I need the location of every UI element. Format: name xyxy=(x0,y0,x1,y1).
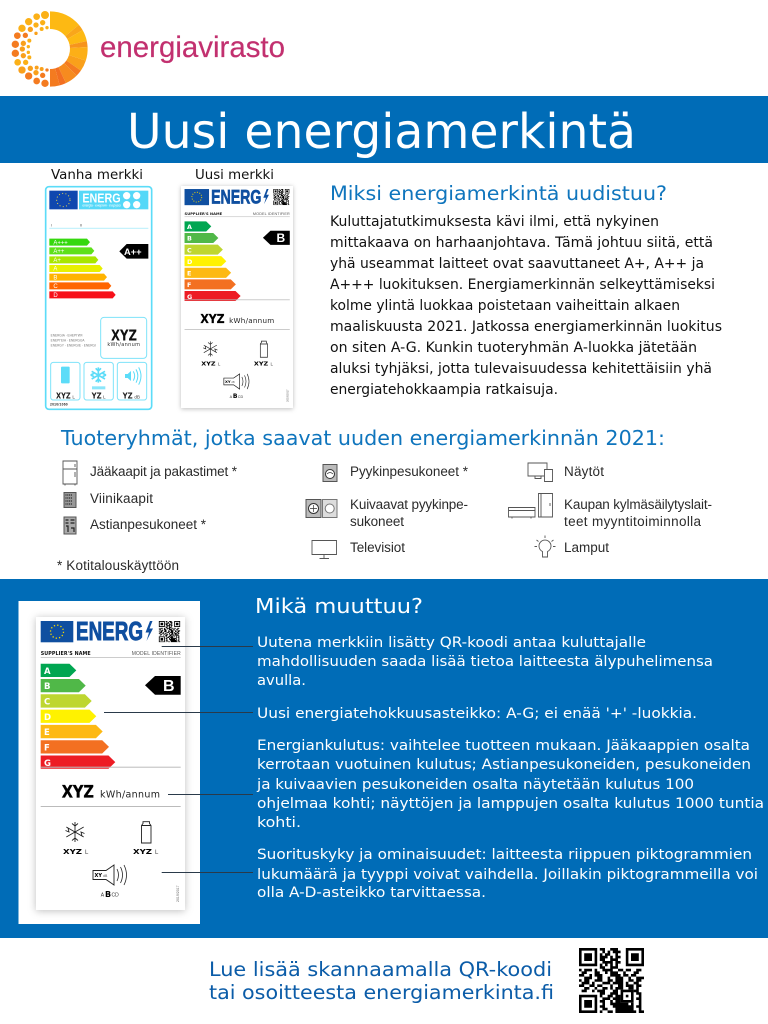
new energy label, large: L xyxy=(85,850,89,856)
text: QR code: Uutena merkkiin lisätty QR-koodi antaa kuluttajalle xyxy=(257,635,646,651)
text: energy consumption: kerrotaan vuotuinen kulutus; Astianpesukoneiden, pesukoneiden xyxy=(257,757,751,773)
panel: why the label is changing xyxy=(330,182,722,398)
icon: wine cabinet xyxy=(64,492,76,508)
new energy label, small: XYZ xyxy=(200,311,225,326)
icon: television xyxy=(312,540,336,558)
old energy label: ENERGIA · ЕНЕРГИЯ xyxy=(51,334,83,338)
new energy label, large: XYZ xyxy=(62,783,94,802)
new energy label, large: dB xyxy=(103,874,108,878)
item: washer dryers: Kuivaavat pyykinpe- xyxy=(350,497,468,512)
new energy label, large: L xyxy=(155,850,159,856)
footer QR code xyxy=(579,948,644,1013)
new energy label, large: MODEL IDENTIFIER xyxy=(132,651,181,657)
text: performance and features xyxy=(257,847,758,901)
icon: washing machine xyxy=(323,464,337,482)
old energy label: II xyxy=(80,223,82,228)
new energy label, small: XY xyxy=(225,380,231,384)
footnote: * Kotitalouskäyttöön xyxy=(57,558,179,573)
old energy label: energia · енергия · ενεργεια xyxy=(82,203,121,207)
text block: yhä useammat laitteet ovat saavuttaneet A+, A++ ja xyxy=(330,256,704,272)
new energy label, small: C xyxy=(187,246,192,254)
new energy label, large: A xyxy=(44,667,51,677)
old energy label: YZ xyxy=(91,391,102,400)
new energy label, large: XYZ xyxy=(133,848,152,856)
item: televisions: Televisiot xyxy=(350,540,405,555)
text: efficiency scale: Uusi energiatehokkuusasteikko: A-G; ei enää '+' -luokkia. xyxy=(257,706,697,722)
old energy label: ΕΝΕΡΓΕΙΑ · ENERGIJA xyxy=(51,339,85,343)
heading: Miksi energiamerkintä uudistuu? xyxy=(330,182,667,205)
new energy label, large: B xyxy=(44,682,50,692)
old energy label: I xyxy=(51,223,52,228)
text block xyxy=(330,214,722,398)
new energy label, large: F xyxy=(44,744,50,754)
text: performance and features: Suorituskyky ja ominaisuudet: laitteesta riippuen piktogrammien xyxy=(257,847,752,863)
new energy label, large: D xyxy=(44,713,51,723)
new energy label, large: CD xyxy=(112,893,119,899)
new energy label, large: G xyxy=(44,759,51,769)
new energy label, large: B xyxy=(105,890,111,899)
old energy label: L xyxy=(103,394,106,399)
new energy label, small: MODEL IDENTIFIER xyxy=(253,212,290,216)
new energy label, large: 2019/2017 xyxy=(176,885,180,902)
old energy label: A++ xyxy=(53,249,65,255)
new energy label, small: L xyxy=(218,362,221,367)
old energy label: A xyxy=(53,267,57,273)
new energy label, small: F xyxy=(187,281,191,289)
new energy label, small: B xyxy=(233,393,238,400)
new energy label, small: B xyxy=(187,235,192,243)
old energy label: C xyxy=(53,284,58,290)
new energy label, large: SUPPLIER'S NAME xyxy=(41,651,91,657)
item: displays: Näytöt xyxy=(564,464,604,479)
new energy label, large: E xyxy=(44,728,50,738)
new energy label, small: B xyxy=(276,231,285,245)
old energy label: A++ xyxy=(124,247,142,257)
new energy label, small: dB xyxy=(231,380,235,384)
new energy label, large: A xyxy=(101,893,105,899)
new energy label, large: kWh/annum xyxy=(100,790,160,801)
item: lamps: Lamput xyxy=(564,540,609,555)
item: commercial refrigerators xyxy=(564,497,712,529)
old energy label: D xyxy=(53,293,58,299)
text: performance and features: olla A-D-asteikko tarvittaessa. xyxy=(257,885,486,901)
text: energy consumption xyxy=(256,738,764,831)
item: dishwashers: Astianpesukoneet * xyxy=(90,517,207,532)
new energy label, large: XYZ xyxy=(63,848,82,856)
heading: Tuoteryhmät, jotka saavat uuden energiamerkinnän 2021: xyxy=(60,426,665,450)
icon: fridge xyxy=(63,461,77,486)
new energy label, large: C xyxy=(44,698,50,708)
new energy label, small: XYZ xyxy=(201,362,216,368)
old energy label: XYZ xyxy=(56,391,71,400)
heading: Mikä muuttuu? xyxy=(255,594,423,618)
text: energy consumption: ja kuivaavien pesukoneiden osalta näytetään kulutus 100 xyxy=(256,777,694,793)
title: Uusi energiamerkintä xyxy=(127,104,636,160)
new energy label, small: E xyxy=(187,269,191,277)
old energy label: 2010/1060 xyxy=(50,402,68,406)
item: washer dryers xyxy=(350,497,468,529)
icon: washer dryers xyxy=(306,500,337,518)
old energy label: YZ xyxy=(122,391,133,400)
text block: aluksi tyhjäksi, jotta tulevaisuudessa kehitettäisiin yhä xyxy=(330,361,712,377)
item: fridges: Jääkaapit ja pakastimet * xyxy=(90,464,238,479)
new energy label, small xyxy=(181,186,293,408)
text: performance and features: lukumäärä ja tyyppi voivat vaihdella. Joillakin piktogrammeilla voi xyxy=(257,867,758,883)
old energy label: A+ xyxy=(53,258,61,264)
new energy label, small: D xyxy=(187,258,192,266)
panel: product groups xyxy=(57,426,712,573)
item: washing machines: Pyykinpesukoneet * xyxy=(350,464,469,479)
logo wordmark: energiavirasto xyxy=(100,31,285,64)
text block: A+++ luokituksen. Energiamerkinnän selkeyttämiseksi xyxy=(330,277,715,293)
old energy label: ENERGY · ENERGIE · ENERGI xyxy=(51,344,96,348)
old energy label: XYZ xyxy=(111,327,137,344)
logo mark: sun ring xyxy=(12,11,88,87)
text block: maaliskuusta 2021. Jatkossa energiamerkinnän luokitus xyxy=(330,319,722,335)
new energy label, small: L xyxy=(270,362,273,367)
text: energy consumption: Energiankulutus: vaihtelee tuotteen mukaan. Jääkaappien osalta xyxy=(257,738,750,754)
new energy label, small: ENERG xyxy=(211,186,261,208)
icon: monitor and tablet xyxy=(528,463,552,482)
new energy label, large: XY xyxy=(94,873,102,879)
text: QR code: mahdollisuuden saada lisää tietoa laitteesta älypuhelimensa xyxy=(257,654,713,670)
new energy label, small: CD xyxy=(238,395,243,399)
text: energy consumption: ohjelmaa kohti; näyttöjen ja lamppujen osalta kulutus 1000 tuntia xyxy=(257,796,764,812)
item: commercial refrigerators: Kaupan kylmäsäilytyslait- xyxy=(564,497,712,512)
white label card xyxy=(18,601,200,924)
new energy label, large: B xyxy=(163,678,175,695)
old energy label xyxy=(46,187,152,409)
item: wine cabinets: Viinikaapit xyxy=(90,491,153,506)
item: washer dryers: sukoneet xyxy=(350,514,404,529)
new energy label, small: A xyxy=(230,395,233,399)
item: commercial refrigerators: teet myyntitoiminnolla xyxy=(564,514,701,529)
new energy label, large: ENERG xyxy=(76,616,143,646)
title banner xyxy=(0,96,768,163)
text block: kolme ylintä luokkaa poistetaan vaiheittain alkaen xyxy=(330,298,680,314)
icon: lamp xyxy=(534,536,556,557)
text block: mittakaava on harhaanjohtava. Tämä johtuu siitä, että xyxy=(330,235,713,251)
old energy label: B xyxy=(53,275,57,281)
footer call to action xyxy=(209,958,554,1004)
new energy label, small: SUPPLIER'S NAME xyxy=(185,212,223,216)
old energy label: dB xyxy=(134,394,140,399)
old energy label: A+++ xyxy=(53,240,68,246)
old energy label: kWh/annum xyxy=(107,342,140,348)
old energy label: ENERG xyxy=(82,191,121,206)
icon: dishwasher xyxy=(64,517,76,534)
text: QR code: avulla. xyxy=(257,673,306,689)
footer call to action: tai osoitteesta energiamerkinta.fi xyxy=(209,981,554,1004)
new energy label, small: 2019/2017 xyxy=(286,389,289,402)
old energy label: L xyxy=(72,394,75,399)
new energy label, small: A xyxy=(187,223,192,231)
connector lines xyxy=(104,646,253,872)
caption: new label: Uusi merkki xyxy=(195,167,274,183)
new energy label, small: XYZ xyxy=(254,362,268,368)
new energy label, large xyxy=(36,616,185,910)
text: QR code xyxy=(257,635,713,689)
text block: Kuluttajatutkimuksesta kävi ilmi, että nykyinen xyxy=(330,214,659,230)
new energy label, small: G xyxy=(187,293,192,301)
caption: old label: Vanha merkki xyxy=(51,167,143,183)
panel: what changes xyxy=(0,579,768,938)
logo: energiavirasto xyxy=(12,11,285,87)
new energy label, small: kWh/annum xyxy=(229,316,274,325)
text block: energiatehokkaampia ratkaisuja. xyxy=(330,382,558,398)
icon: commercial fridges xyxy=(508,494,552,518)
text: energy consumption: kohti. xyxy=(257,815,301,831)
text block: on siten A-G. Kunkin tuoteryhmän A-luokka jätetään xyxy=(330,340,697,356)
footer call to action: Lue lisää skannaamalla QR-koodi xyxy=(209,958,552,981)
